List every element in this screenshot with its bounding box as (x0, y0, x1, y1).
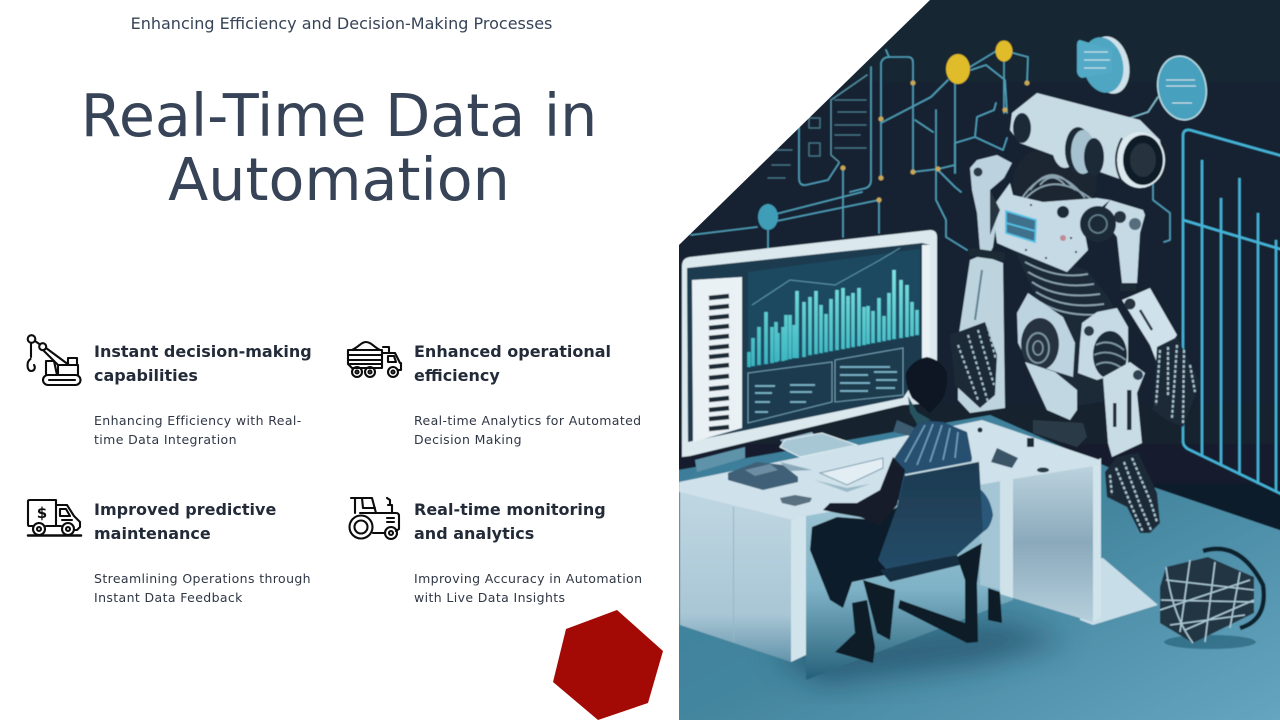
office chair (878, 461, 983, 582)
title: Automation (168, 146, 510, 214)
heading: real-time monitoring: Real-time monitoring (414, 500, 606, 519)
heading: enhanced operational efficiency (414, 342, 611, 384)
icon: crane (28, 335, 80, 385)
text: predictive maintenance description (94, 571, 311, 605)
icon: delivery truck with dollar: $ (37, 504, 47, 522)
circuit lines (691, 50, 1170, 250)
icon: dump truck (348, 342, 401, 377)
heading: instant decision-making: capabilities (94, 366, 198, 384)
robot head (1010, 93, 1165, 188)
desk items (728, 420, 1049, 506)
text: instant decision-making description: time Data Integration (94, 432, 237, 447)
text: real-time monitoring description: Improving Accuracy in Automation (414, 571, 642, 586)
icon: delivery truck with dollar (28, 500, 81, 536)
small teal node (758, 204, 778, 230)
text: predictive maintenance description: Instant Data Feedback (94, 590, 243, 605)
heading: real-time monitoring (414, 500, 606, 542)
monitor (682, 230, 937, 472)
text: real-time monitoring description (414, 571, 642, 605)
text: real-time monitoring description: with Live Data Insights (414, 590, 565, 605)
illustration: robot and analyst at desk (650, 0, 1280, 720)
heading: instant decision-making: Instant decision-making (94, 342, 312, 361)
chat bubbles (1077, 33, 1211, 124)
heading: improved predictive maintenance: Improved predictive (94, 500, 276, 519)
desk (679, 420, 1158, 680)
circuit nodes (840, 80, 1030, 202)
robot lower leg right (1103, 362, 1145, 457)
yellow data nodes (946, 40, 1012, 84)
text: operational efficiency description: Decision Making (414, 432, 522, 447)
monitor bar chart (749, 270, 917, 367)
text: predictive maintenance description: Streamlining Operations through (94, 571, 311, 586)
desk floor shadow (770, 620, 1070, 685)
robot hand right (1105, 453, 1160, 533)
heading: instant decision-making (94, 342, 312, 384)
robot torso (992, 183, 1116, 272)
heading: improved predictive maintenance: maintenance (94, 524, 211, 542)
robot arm right (1100, 200, 1200, 427)
robot left arm (950, 155, 1012, 413)
heading: real-time monitoring: and analytics (414, 524, 534, 542)
text: operational efficiency description: Real-time Analytics for Automated (414, 413, 642, 428)
robot neck (1021, 152, 1092, 201)
heading: enhanced operational efficiency: Enhanced operational (414, 342, 611, 361)
heading: improved predictive maintenance (94, 500, 276, 542)
analyst (810, 357, 1002, 663)
title: Real-Time Data in (81, 82, 597, 150)
wall background (679, 0, 1280, 531)
text: operational efficiency description (414, 413, 642, 447)
robot part on floor (1160, 549, 1264, 649)
heading: enhanced operational efficiency: efficiency (414, 366, 500, 384)
decorative hexagon (553, 610, 663, 720)
floor (650, 415, 1280, 720)
subtitle: Enhancing Efficiency and Decision-Making Processes (131, 14, 552, 33)
text: instant decision-making description: Enhancing Efficiency with Real- (94, 413, 302, 428)
right data panel (1183, 130, 1280, 503)
title (81, 82, 597, 214)
icon: tractor (350, 498, 399, 539)
text: instant decision-making description (94, 413, 302, 447)
robot abdomen and hips (1015, 250, 1128, 447)
